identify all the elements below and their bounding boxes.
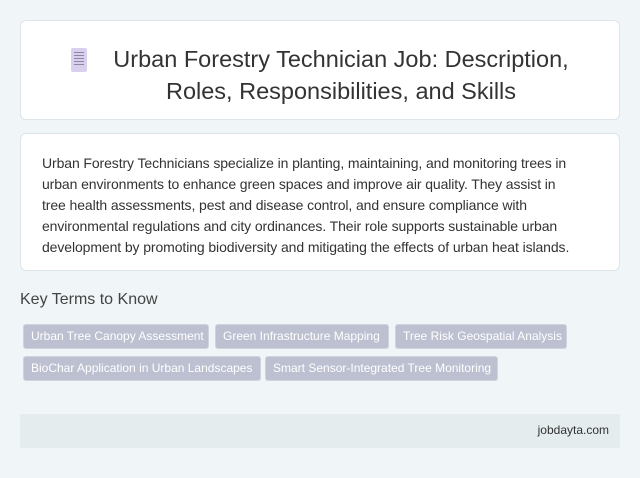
heading: key terms: Key Terms to Know: [20, 291, 158, 308]
title card: [20, 20, 620, 120]
icon: document: [71, 48, 87, 72]
description text: Urban Forestry Technicians specialize in planting, maintaining, and monitoring trees in urban environments to enhance green spaces and improve air quality. They assist in tree health assessments, pest and disease control, and ensure compliance with environmental regulations and city ordinances. Their role supports sustainable urban development by promoting biodiversity and mitigating the effects of urban heat islands.: [42, 155, 569, 255]
tags: Smart Sensor-Integrated Tree Monitoring: [273, 361, 491, 375]
tags: BioChar Application in Urban Landscapes: [31, 361, 252, 375]
tags: Urban Tree Canopy Assessment: [31, 329, 204, 343]
footer: jobdayta.com: [538, 423, 609, 437]
tags: Green Infrastructure Mapping: [223, 329, 380, 343]
description card: [20, 133, 620, 271]
title: Urban Forestry Technician Job: Description, Roles, Responsibilities, and Skills: [113, 46, 569, 104]
tags: Tree Risk Geospatial Analysis: [403, 329, 562, 343]
footer: [20, 414, 620, 448]
